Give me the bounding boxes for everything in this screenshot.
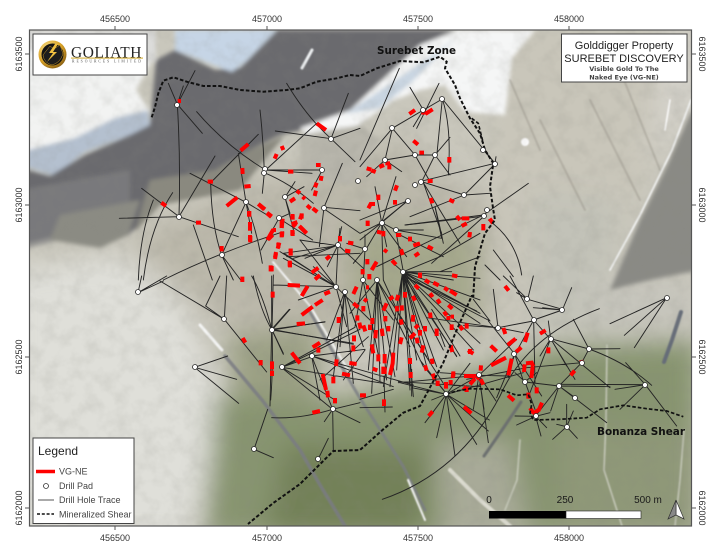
drill hole traces — [119, 68, 677, 499]
bottom easting labels: 457000 — [252, 533, 282, 543]
top easting labels: 457000 — [252, 14, 282, 24]
right northing labels: 6163000 — [697, 187, 707, 223]
mineralized shear dashed lines — [152, 57, 683, 524]
left northing labels: 6163500 — [14, 36, 24, 72]
scale bar: 500 m — [634, 495, 662, 506]
legend — [33, 438, 134, 524]
logo tagline: RESOURCES LIMITED — [72, 60, 141, 64]
title box — [562, 34, 687, 82]
top easting labels — [100, 14, 584, 24]
left northing labels: 6162500 — [14, 339, 24, 375]
top easting labels: 458000 — [554, 14, 584, 24]
zone label: Bonanza Shear: Bonanza Shear — [597, 426, 686, 438]
top easting labels: 457500 — [403, 14, 433, 24]
right northing labels — [697, 36, 707, 526]
legend item: VG-NE: VG-NE — [59, 466, 88, 476]
right northing labels: 6162500 — [697, 339, 707, 375]
bottom easting labels: 458000 — [554, 533, 584, 543]
left northing labels: 6162000 — [14, 490, 24, 526]
right northing labels: 6162000 — [697, 490, 707, 526]
top easting labels: 456500 — [100, 14, 130, 24]
bottom easting labels — [100, 533, 584, 543]
logo wordmark: GOLIATH — [71, 44, 142, 62]
bottom easting labels: 457500 — [403, 533, 433, 543]
drill pads — [136, 96, 670, 462]
title box: Visible Gold To The — [589, 65, 659, 73]
bottom easting labels: 456500 — [100, 533, 130, 543]
scale bar: 0 — [486, 495, 492, 506]
scale bar — [486, 495, 662, 518]
title box: SUREBET DISCOVERY — [564, 53, 684, 65]
legend item: Mineralized Shear: Mineralized Shear — [59, 510, 132, 520]
icon: north arrow — [668, 500, 684, 519]
right northing labels: 6163500 — [697, 36, 707, 72]
icon: gold circle emblem — [38, 40, 66, 68]
scale bar: 250 — [557, 495, 574, 506]
legend item: Drill Pad: Drill Pad — [59, 481, 93, 491]
title box: Naked Eye (VG-NE) — [589, 74, 659, 82]
logo: Goliath Resources — [33, 34, 147, 75]
zone label: Surebet Zone: Surebet Zone — [377, 45, 456, 57]
legend item: Drill Hole Trace: Drill Hole Trace — [59, 495, 121, 505]
logo rule — [71, 58, 143, 59]
title box: Golddigger Property — [575, 40, 674, 52]
left northing labels: 6163000 — [14, 187, 24, 223]
legend: Legend — [38, 444, 78, 458]
left northing labels — [14, 36, 24, 526]
VG-NE red intercepts — [161, 101, 582, 416]
